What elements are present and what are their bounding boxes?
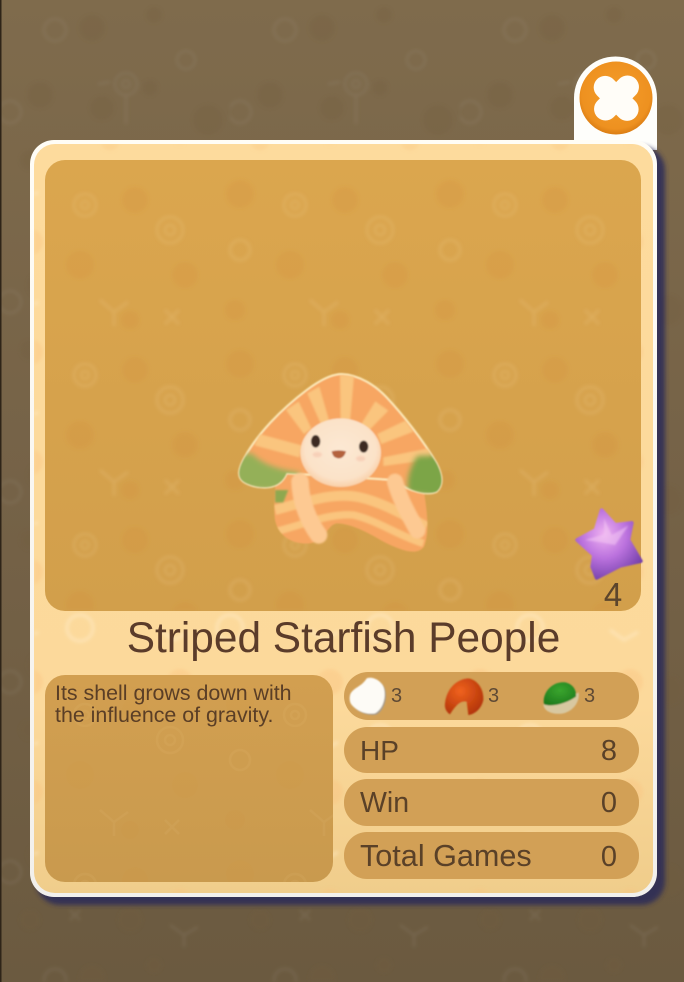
panel: resources (344, 672, 639, 720)
card shadow (36, 146, 665, 905)
card fill (34, 144, 653, 893)
stat: Total Games (344, 832, 639, 879)
description text: Its shell grows down with (55, 681, 292, 705)
description text: the influence of gravity. (55, 703, 273, 727)
stat: HP: HP (360, 735, 399, 766)
panel: description (45, 675, 333, 882)
icon: orange circle (580, 62, 652, 134)
card frame (30, 140, 657, 897)
stat: HP: 8 (601, 735, 617, 767)
creature: striped starfish person (233, 374, 447, 557)
stat: Total Games: 0 (601, 841, 617, 873)
stat: Total Games: Total Games (360, 839, 532, 873)
panel: portrait (45, 160, 641, 611)
icon: white cross (578, 60, 655, 136)
card (30, 140, 657, 897)
creature stripes (233, 375, 447, 498)
icon: white shell (350, 678, 386, 715)
star count: 4 (604, 576, 622, 613)
creature face (300, 418, 381, 487)
stat: Win: 0 (601, 787, 617, 819)
creature eyes (311, 435, 368, 453)
stat: Win: Win (360, 787, 409, 819)
creature upper shell (239, 374, 442, 493)
icon: red shell (445, 678, 483, 715)
close button (574, 56, 657, 150)
creature lower body (274, 474, 428, 552)
icon: green shell (543, 682, 579, 714)
title: Striped Starfish People (127, 614, 560, 661)
stat: HP (344, 727, 639, 773)
count: green shell: 3 (584, 685, 595, 707)
creature arms (300, 482, 417, 535)
close tab (574, 56, 657, 150)
creature mouth (332, 450, 346, 458)
count: white shell: 3 (391, 685, 402, 707)
creature cheeks (313, 452, 365, 461)
stat: Win (344, 779, 639, 826)
icon: purple star (577, 510, 641, 578)
count: red shell: 3 (488, 685, 499, 707)
